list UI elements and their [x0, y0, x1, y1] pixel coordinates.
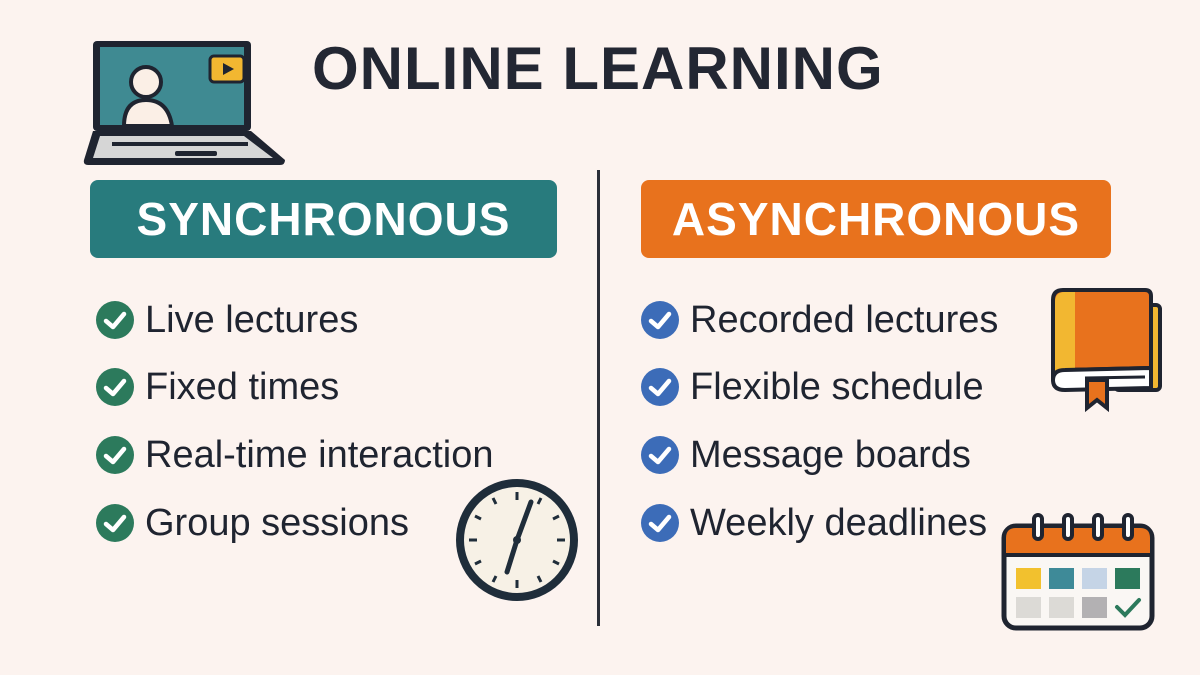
banner: synchronous: SYNCHRONOUS	[137, 193, 510, 245]
icon: calendar	[1002, 513, 1154, 630]
list: asynchronous	[641, 298, 998, 544]
icon: laptop	[84, 41, 285, 165]
icon: clock	[456, 479, 578, 601]
banner: synchronous	[90, 180, 557, 258]
item: Flexible schedule	[690, 366, 984, 408]
item: Fixed times	[145, 366, 339, 408]
title: ONLINE LEARNING	[312, 35, 884, 102]
item: Group sessions	[145, 502, 409, 544]
item: Live lectures	[145, 298, 358, 340]
list: synchronous	[96, 298, 493, 544]
icon: book	[1051, 288, 1162, 412]
banner: asynchronous	[641, 180, 1111, 258]
banner: asynchronous: ASYNCHRONOUS	[672, 193, 1080, 245]
divider	[597, 170, 600, 626]
item: Weekly deadlines	[690, 502, 987, 544]
item: Recorded lectures	[690, 298, 998, 340]
item: Real-time interaction	[145, 434, 493, 476]
item: Message boards	[690, 434, 971, 476]
